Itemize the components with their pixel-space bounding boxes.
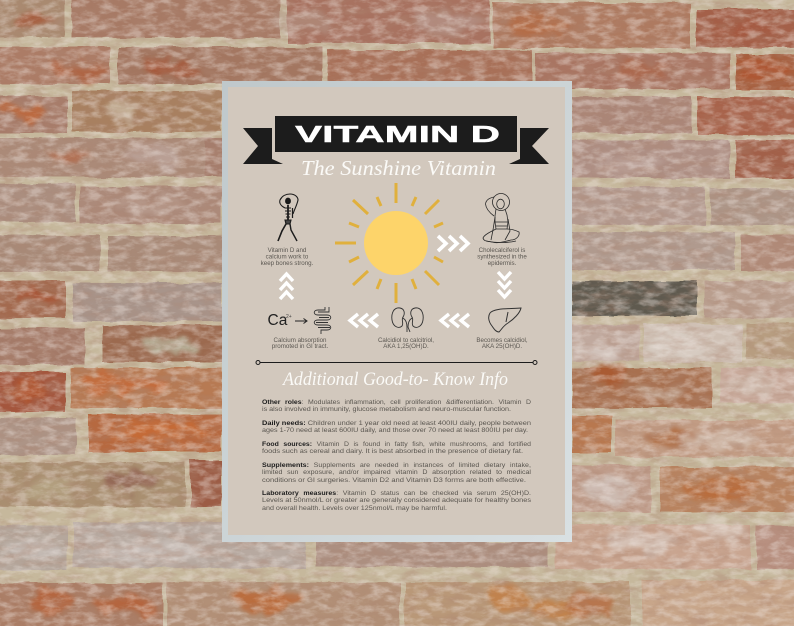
subtitle: The Sunshine Vitamin: [301, 156, 496, 180]
icon: skeleton: [278, 194, 298, 241]
caption: bones: calcium work to: [266, 254, 309, 260]
text block: supplements line 2: limited sun exposure, and/or impaired vitamin D absorption related to medical: [262, 469, 531, 476]
arrow: gut to bones: [280, 274, 293, 299]
caption: liver: Becomes calcidiol,: [476, 337, 528, 344]
text block: daily needs: Daily needs: Children under 1 year old need at least 400IU daily, people between: [262, 420, 532, 427]
caption: calcium absorption: Calcium absorption: [274, 337, 327, 344]
text block: supplements line 3: conditions or GI surgeries. Vitamin D2 and Vitamin D3 forms are both effective.: [262, 477, 526, 484]
caption: skin: synthesized in the: [477, 254, 527, 260]
arrow: skin to liver: [498, 272, 511, 297]
text block: food sources line 2: foods such as cereal and dairy. It is best absorbed in the presence of dietary fat.: [262, 448, 523, 455]
text block: laboratory measures line 3: and overall health. Levels over 125nmol/L may be harmful.: [262, 505, 447, 512]
text block: other roles line 2: is also involved in immunity, glucose metabolism and neuro-muscular function.: [262, 406, 511, 413]
poster content: [243, 116, 549, 512]
arrow: sun to skin: [438, 236, 468, 251]
caption: bones: Vitamin D and: [268, 247, 307, 254]
icon: intestine: [314, 307, 331, 334]
icon: seated woman: [483, 194, 519, 243]
caption: calcium absorption: promoted in GI tract.: [272, 343, 328, 350]
caption: bones: keep bones strong.: [261, 260, 314, 267]
title: VITAMIN D: [295, 121, 500, 147]
caption: liver: AKA 25(OH)D.: [482, 343, 522, 350]
icon: calcium ion: Ca: [268, 312, 288, 329]
text block: other roles: Other roles : Modulates inflammation, cell proliferation &differentiation. Vitamin D: [262, 399, 531, 406]
heading: additional info: Additional Good-to- Know Info: [281, 369, 508, 390]
text block: laboratory measures line 2: Levels at 50nmol/L or greater are generally considered adequate for healthy bones: [262, 497, 531, 504]
caption: kidneys: Calcidiol to calcitriol,: [378, 337, 434, 344]
caption: skin: epidermis.: [488, 260, 517, 267]
arrow: kidneys to gut: [350, 314, 378, 327]
text block: food sources: Food sources: Vitamin D is found in fatty fish, white mushrooms, and fortified: [262, 441, 532, 448]
icon: liver: [489, 308, 521, 332]
caption: kidneys: AKA 1,25(OH)D.: [383, 343, 429, 350]
icon: sun: [335, 183, 443, 303]
title banner: [243, 116, 549, 164]
icon: calcium ion: [268, 312, 307, 329]
text block: supplements: Supplements: Supplements are needed in instances of limited dietary intake,: [262, 462, 531, 469]
arrow: liver to kidneys: [441, 314, 469, 327]
icon: calcium ion: 2+: [286, 314, 292, 320]
caption: skin: Cholecalciferol is: [479, 247, 525, 254]
poster frame: [222, 81, 572, 542]
divider: [256, 360, 537, 364]
text block: daily needs line 2: ages 1-70 need at least 600IU daily, and those over 70 need at least 800IU per day.: [262, 427, 528, 434]
text block: laboratory measures: Laboratory measures : Vitamin D status can be checked via serum 25(OH)D.: [262, 490, 531, 497]
icon: kidneys: [392, 308, 423, 332]
